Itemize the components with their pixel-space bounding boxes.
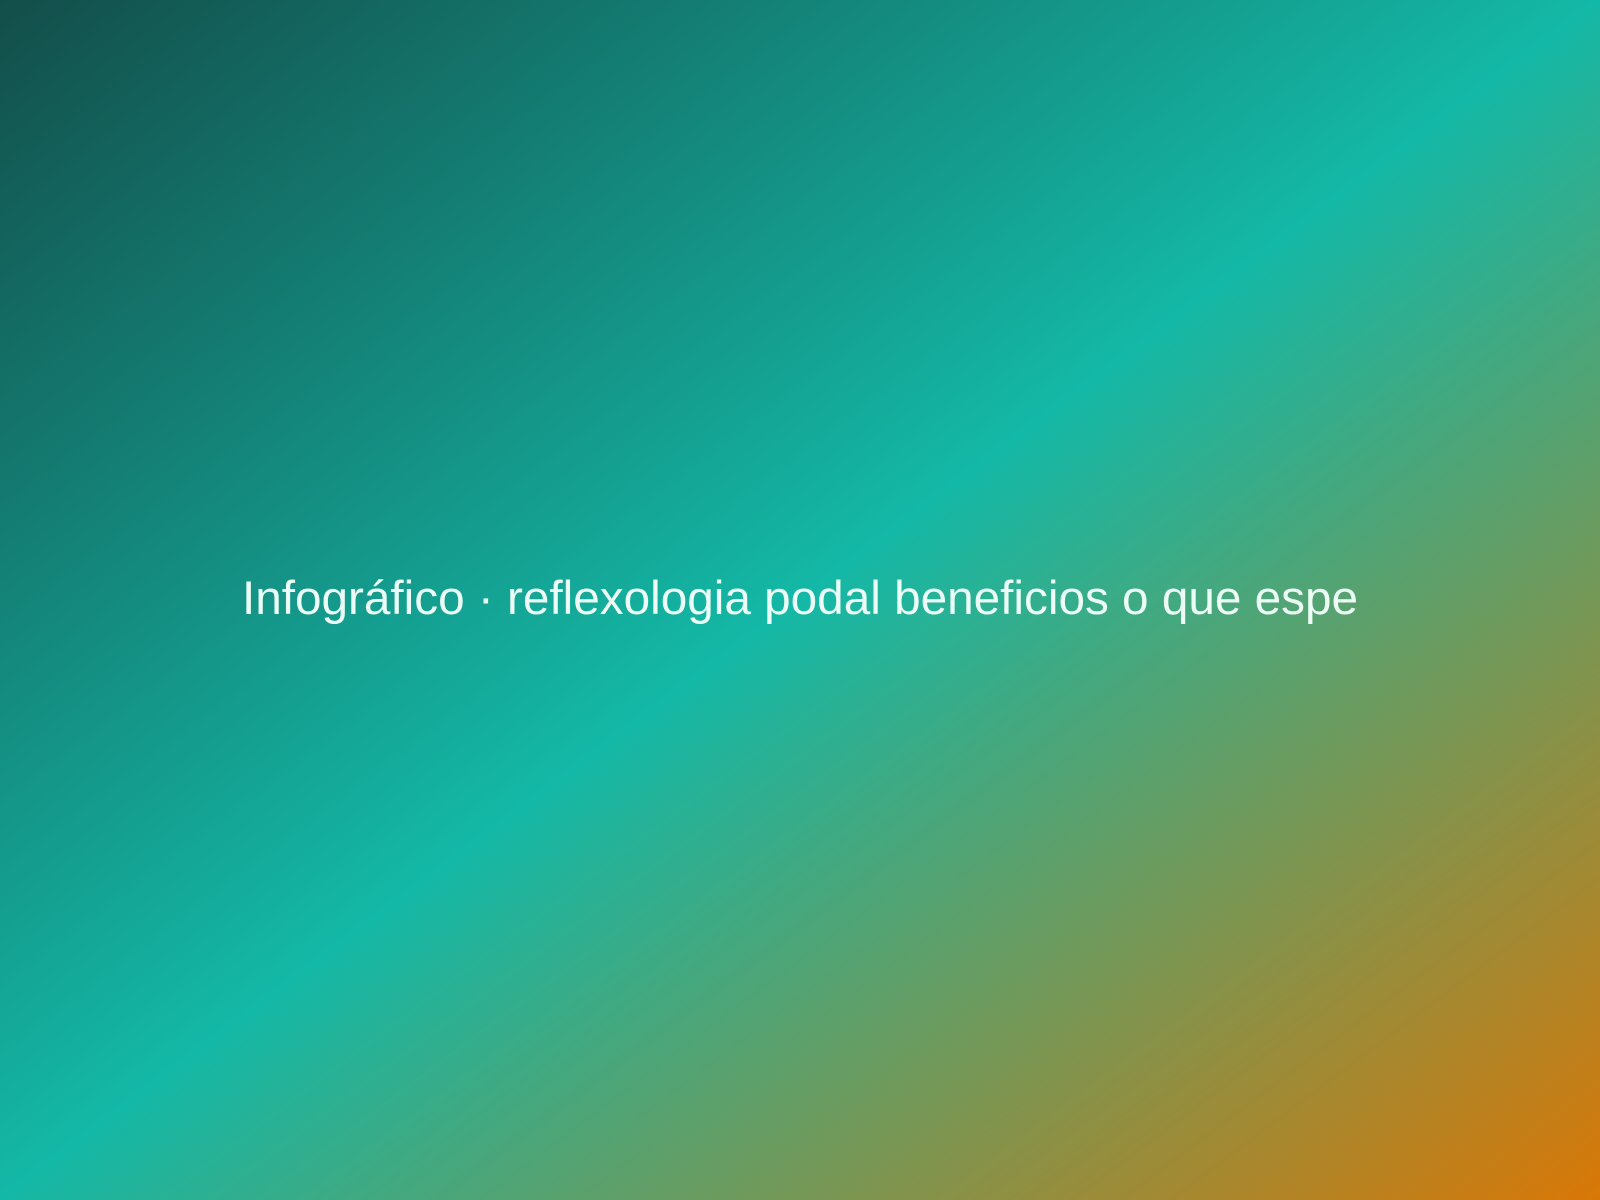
- title: Infográfico · reflexologia podal beneficios o que espe: [242, 572, 1358, 625]
